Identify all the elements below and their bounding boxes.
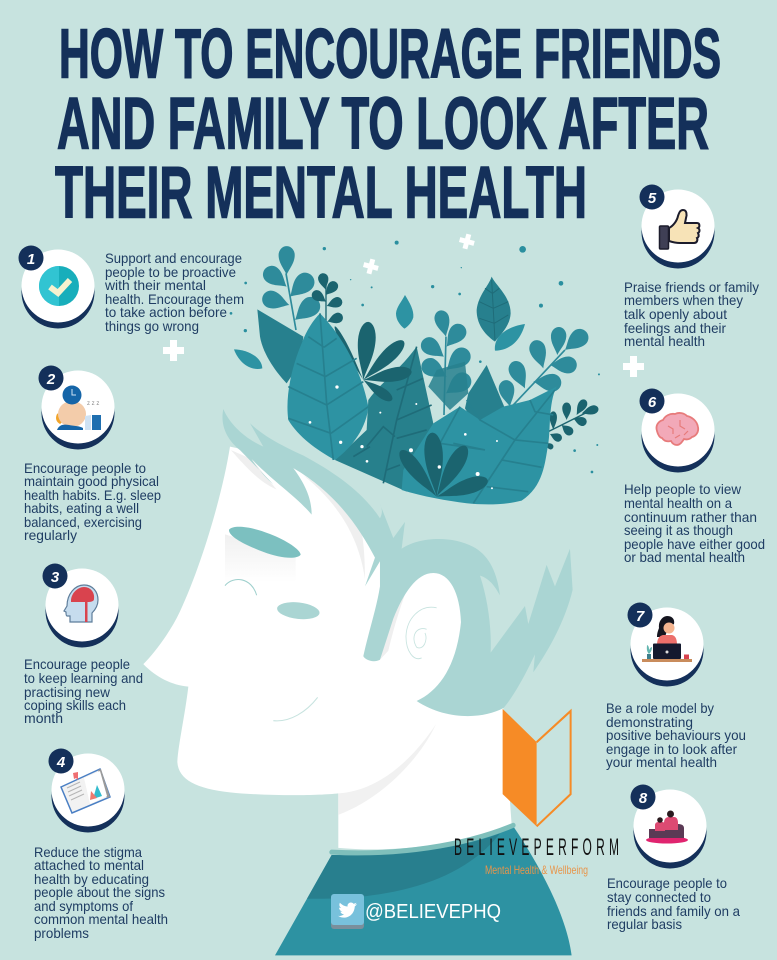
text: tip 8 — [607, 876, 740, 932]
panel: tip 2 — [24, 366, 161, 543]
text: tip 1: people to be proactive — [105, 265, 236, 280]
icon: open book with chart: 4 — [56, 754, 66, 771]
handle text: @BELIEVEPHQ — [365, 901, 501, 923]
back left leaf — [257, 309, 303, 383]
panel: tip 8 — [607, 784, 740, 932]
text: tip 7: demonstrating — [606, 715, 693, 730]
cheek — [276, 600, 320, 621]
text: tip 5: Praise friends or family — [624, 280, 759, 295]
icon: woman at laptop — [628, 602, 704, 686]
panel: tip 3 — [24, 564, 143, 726]
text: tip 3: to keep learning and — [24, 671, 143, 686]
logo: BelievePerform — [454, 709, 619, 877]
mid-right dark leaf — [428, 362, 505, 430]
icon: sleeping person — [38, 366, 114, 450]
top dark palm — [333, 321, 413, 404]
text: tip 4: people about the signs — [34, 885, 165, 900]
text: tip 6 — [624, 482, 765, 565]
panel: tip 5 — [624, 184, 759, 349]
face shading — [225, 450, 436, 815]
small dark fern — [310, 272, 344, 327]
icon: check badge: 1 — [27, 251, 35, 268]
icon: twitter — [331, 894, 364, 929]
text: tip 3: coping skills each — [24, 698, 126, 713]
plus signs — [163, 232, 644, 377]
text: tip 6: Help people to view — [624, 482, 741, 497]
text: tip 5: members when they — [624, 293, 743, 308]
far right small fern — [544, 398, 600, 451]
icon: open book with chart — [48, 748, 124, 832]
face and neck — [143, 447, 512, 849]
smile — [273, 697, 318, 721]
text: tip 1: Support and encourage — [105, 251, 242, 266]
text: tip 1: with their mental — [104, 278, 206, 293]
logo tagline: Mental Health & Wellbeing — [485, 863, 588, 877]
text: tip 2: Encourage people to — [24, 461, 146, 476]
text: tip 5: mental health — [624, 334, 705, 349]
text: tip 5: feelings and their — [624, 321, 726, 336]
icon: sleeping person: 2 — [46, 371, 56, 388]
text: tip 4: health by educating — [34, 872, 149, 887]
text: tip 8: stay connected to — [607, 890, 711, 905]
text: tip 4: and symptoms of — [34, 899, 133, 914]
icon: check badge — [18, 246, 94, 328]
bottom dark palm — [395, 432, 490, 504]
text: tip 5 — [624, 280, 759, 349]
shirt — [275, 826, 572, 955]
text: tip 6: people have either good — [624, 537, 765, 552]
floating dots — [230, 241, 600, 473]
icon: sleeping person: z z z — [87, 401, 99, 407]
text: tip 5: talk openly about — [624, 307, 727, 322]
text: tip 2: habits, eating a well — [24, 501, 139, 516]
ear detail — [406, 607, 437, 659]
twitter handle — [331, 894, 501, 929]
white sparkles in leaves — [309, 385, 498, 489]
icon: head with brain — [42, 564, 118, 648]
collar — [332, 825, 513, 853]
icon: thumbs up — [640, 184, 714, 268]
icon: thumbs up: 5 — [648, 190, 657, 207]
panel: tip 1 — [18, 246, 244, 334]
main left leaf — [287, 313, 368, 460]
logo mark — [503, 709, 571, 826]
icon: woman at laptop: 7 — [636, 608, 645, 625]
text: tip 2: regularly — [24, 528, 77, 543]
text: tip 6: or bad mental health — [624, 550, 745, 565]
text: tip 4: problems — [34, 926, 89, 941]
illustration: leaves growing from head — [230, 241, 600, 504]
text: tip 1: health. Encourage them — [105, 292, 244, 307]
text: tip 3: Encourage people — [24, 657, 130, 672]
right fern — [497, 325, 592, 408]
panel: tip 6 — [624, 388, 765, 565]
eyebrow — [229, 527, 301, 558]
text: tip 2 — [24, 461, 161, 543]
text: tip 7: your mental health — [606, 755, 717, 770]
top right leaf — [477, 277, 511, 342]
text: tip 4: attached to mental — [34, 858, 144, 873]
text: tip 3: month — [24, 711, 63, 726]
text: tip 2: health habits. E.g. sleep — [24, 488, 161, 503]
text: tip 7: positive behaviours you — [606, 728, 746, 743]
text: tip 4 — [34, 845, 168, 941]
icon: family on sofa — [630, 784, 706, 868]
text: tip 2: maintain good physical — [24, 474, 159, 489]
panel: tip 4 — [34, 748, 168, 941]
text: tip 7 — [606, 701, 746, 770]
text: tip 7: engage in to look after — [606, 742, 737, 757]
text: tip 4: common mental health — [34, 912, 168, 927]
icon: head with brain: 3 — [51, 569, 60, 586]
text: tip 3: practising new — [24, 685, 110, 700]
panel: tip 7 — [606, 602, 746, 770]
small left leaf — [234, 349, 262, 369]
logo name: BELIEVEPERFORM — [454, 835, 619, 861]
icon: brain — [640, 388, 714, 472]
text: tip 6: mental health on a — [624, 496, 732, 511]
text: tip 4: Reduce the stigma — [34, 845, 142, 860]
closed eye — [225, 580, 257, 595]
illustration: head in profile — [143, 409, 573, 955]
text: tip 8: regular basis — [607, 917, 682, 932]
text: tip 6: continuum rather than — [624, 510, 757, 525]
text: tip 6: seeing it as though — [624, 523, 733, 538]
middle dark leaf — [335, 347, 433, 492]
icon: family on sofa: 8 — [639, 790, 648, 807]
text: tip 8: friends and family on a — [607, 904, 740, 919]
icon: brain: 6 — [648, 394, 657, 411]
text: tip 8: Encourage people to — [607, 876, 727, 891]
text: tip 2: balanced, exercising — [24, 515, 142, 530]
text: tip 1: things go wrong — [105, 319, 199, 334]
top left fern — [259, 246, 324, 330]
text: tip 1: to take action before — [105, 305, 227, 320]
text: tip 7: Be a role model by — [606, 701, 714, 716]
big right leaf — [402, 387, 557, 504]
small leaf on top right leaf — [495, 324, 525, 351]
shirt shadow — [307, 834, 500, 899]
small center leaf — [396, 295, 413, 329]
center fern — [417, 309, 475, 415]
hair — [222, 409, 573, 716]
title — [55, 14, 721, 234]
text: tip 3 — [24, 657, 143, 726]
text: tip 1 — [104, 251, 244, 334]
